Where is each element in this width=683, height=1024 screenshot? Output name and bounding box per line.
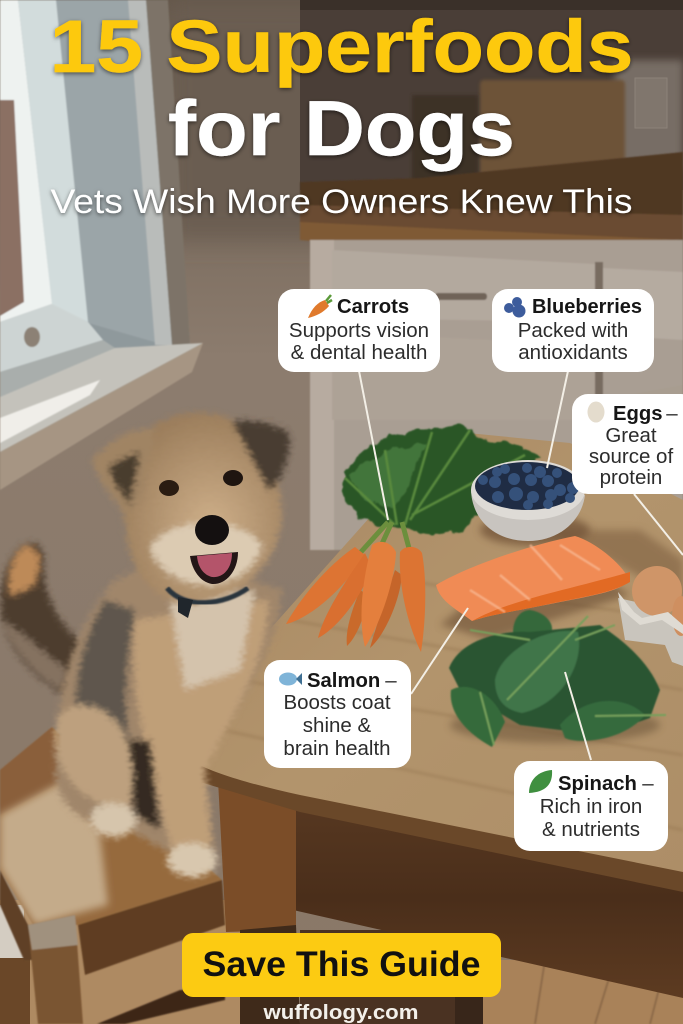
window with casing and sill [0, 0, 203, 490]
callout: spinach: Rich in iron [540, 795, 642, 818]
callout: eggs [572, 394, 683, 494]
button: save this guide: Save This Guide [202, 945, 480, 984]
head [124, 413, 282, 605]
callout: salmon: Salmon [307, 670, 380, 692]
icon: egg [588, 402, 604, 422]
ears [92, 429, 155, 515]
salmon fillet [436, 536, 630, 640]
callout: salmon: – [385, 669, 397, 692]
haunch [55, 705, 133, 815]
callout: salmon: brain health [283, 737, 391, 760]
collar [167, 588, 248, 603]
dog face [159, 470, 248, 618]
callout: salmon [264, 660, 411, 768]
callout: eggs: protein [600, 466, 662, 489]
callout: carrots [278, 289, 440, 372]
callout: blueberries: Packed with [518, 319, 628, 342]
title line 1: 15 Superfoods [50, 5, 634, 88]
subtitle: Vets Wish More Owners Knew This [50, 183, 632, 221]
title [50, 5, 634, 221]
spinach leaves [449, 610, 666, 747]
dog [1, 413, 290, 877]
callout: blueberries [492, 289, 654, 372]
callout: carrots: Supports vision [289, 319, 429, 342]
leader lines from labels to foods [359, 371, 683, 760]
eggs in carton [618, 566, 683, 666]
callout: blueberries: Blueberries [532, 296, 642, 318]
tail [1, 543, 78, 695]
title line 2: for Dogs [168, 84, 515, 172]
website url: wuffology.com [262, 1001, 418, 1024]
icon: blueberries [504, 297, 526, 318]
button: save this guide [182, 933, 501, 997]
mouth [190, 552, 238, 584]
callout: spinach: & nutrients [542, 818, 640, 841]
icon: carrot [308, 295, 332, 318]
callout: carrots: Carrots [337, 296, 409, 318]
icon: spinach leaf [529, 770, 552, 793]
carrots with green tops [286, 423, 540, 652]
eyes [159, 480, 179, 496]
callout: salmon: Boosts coat [283, 691, 391, 714]
wooden chair [0, 727, 225, 1024]
nose [195, 515, 229, 545]
callout: eggs: – [666, 402, 678, 425]
callout: carrots: & dental health [291, 341, 427, 364]
icon: fish [279, 672, 302, 686]
blueberry bowl [471, 460, 590, 546]
table with wooden top and legs [176, 430, 683, 1024]
callout: spinach: – [642, 772, 654, 795]
callout: spinach [514, 761, 668, 851]
callout: blueberries: antioxidants [518, 341, 628, 364]
callout: eggs: Great [605, 424, 657, 447]
callout: eggs: Eggs [613, 403, 663, 425]
kitchen counter and cabinets [300, 152, 683, 550]
carrot greens [342, 423, 540, 534]
callout: eggs: source of [589, 445, 673, 468]
callout: spinach: Spinach [558, 773, 637, 795]
callout: salmon: shine & [303, 714, 372, 737]
body [55, 555, 282, 850]
